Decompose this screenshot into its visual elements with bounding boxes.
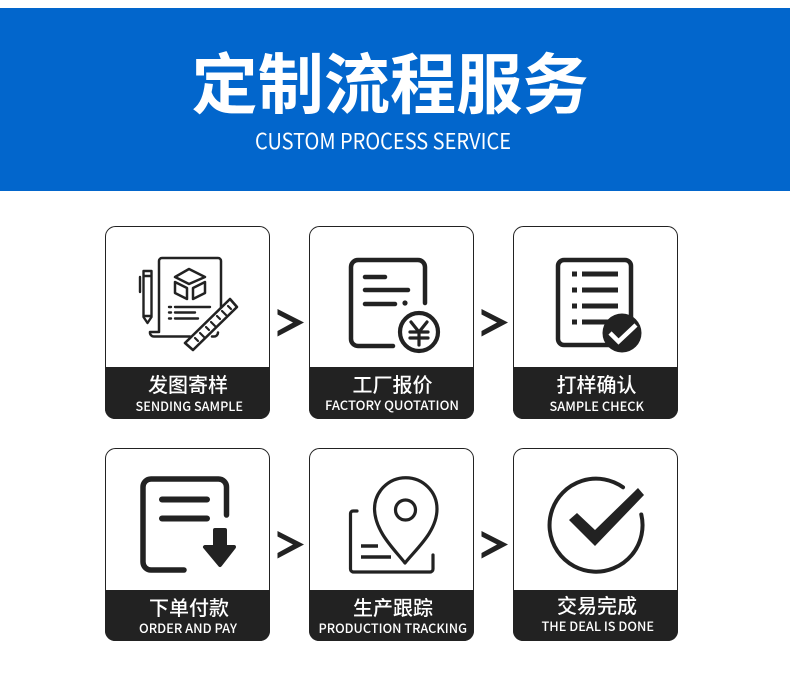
label: 下单付款: 下单付款 bbox=[149, 592, 229, 621]
icon: location pin over tray bbox=[350, 478, 437, 572]
label: 下单付款: ORDER AND PAY bbox=[139, 618, 238, 637]
label: 生产跟踪 bbox=[318, 592, 467, 637]
panel: step 1 sending sample bbox=[105, 226, 270, 419]
label: 交易完成: 交易完成 bbox=[557, 590, 637, 619]
label: 工厂报价: FACTORY QUOTATION bbox=[325, 395, 459, 414]
label: 发图寄样: 发图寄样 bbox=[148, 369, 228, 398]
icon: quote document with yen coin bbox=[351, 260, 438, 351]
label: 发图寄样 bbox=[136, 369, 243, 415]
title: 定制流程服务 bbox=[192, 32, 588, 128]
icon: circled check mark bbox=[550, 479, 644, 572]
arrow: step 1 to 2 bbox=[278, 309, 304, 336]
label: 生产跟踪: PRODUCTION TRACKING bbox=[318, 618, 467, 637]
subtitle: CUSTOM PROCESS SERVICE bbox=[255, 125, 511, 156]
arrow: step 2 to 3 bbox=[482, 309, 508, 336]
icon: document with download arrow bbox=[143, 479, 234, 570]
icon: checklist with tick badge bbox=[558, 260, 642, 352]
label: 打样确认 bbox=[550, 369, 644, 415]
label: 打样确认: SAMPLE CHECK bbox=[550, 396, 644, 415]
panel: step 5 production tracking bbox=[309, 448, 474, 641]
label: 打样确认: 打样确认 bbox=[556, 369, 636, 398]
label: 工厂报价: 工厂报价 bbox=[352, 369, 432, 398]
panel: step 6 the deal is done bbox=[513, 448, 678, 641]
icon: document with box, pencil and ruler bbox=[140, 258, 237, 350]
panel: step 2 factory quotation bbox=[309, 226, 474, 419]
label: 生产跟踪: 生产跟踪 bbox=[353, 592, 433, 621]
panel: step 3 sample check bbox=[513, 226, 678, 419]
header banner bbox=[0, 8, 790, 191]
arrow: step 5 to 6 bbox=[482, 531, 508, 558]
panel: step 4 order and pay bbox=[105, 448, 270, 641]
label: 工厂报价 bbox=[325, 369, 459, 414]
label: 交易完成: THE DEAL IS DONE bbox=[542, 616, 654, 635]
label: 交易完成 bbox=[542, 590, 654, 635]
arrow: step 4 to 5 bbox=[278, 531, 304, 558]
label: 发图寄样: SENDING SAMPLE bbox=[136, 396, 243, 415]
label: 下单付款 bbox=[139, 592, 238, 637]
